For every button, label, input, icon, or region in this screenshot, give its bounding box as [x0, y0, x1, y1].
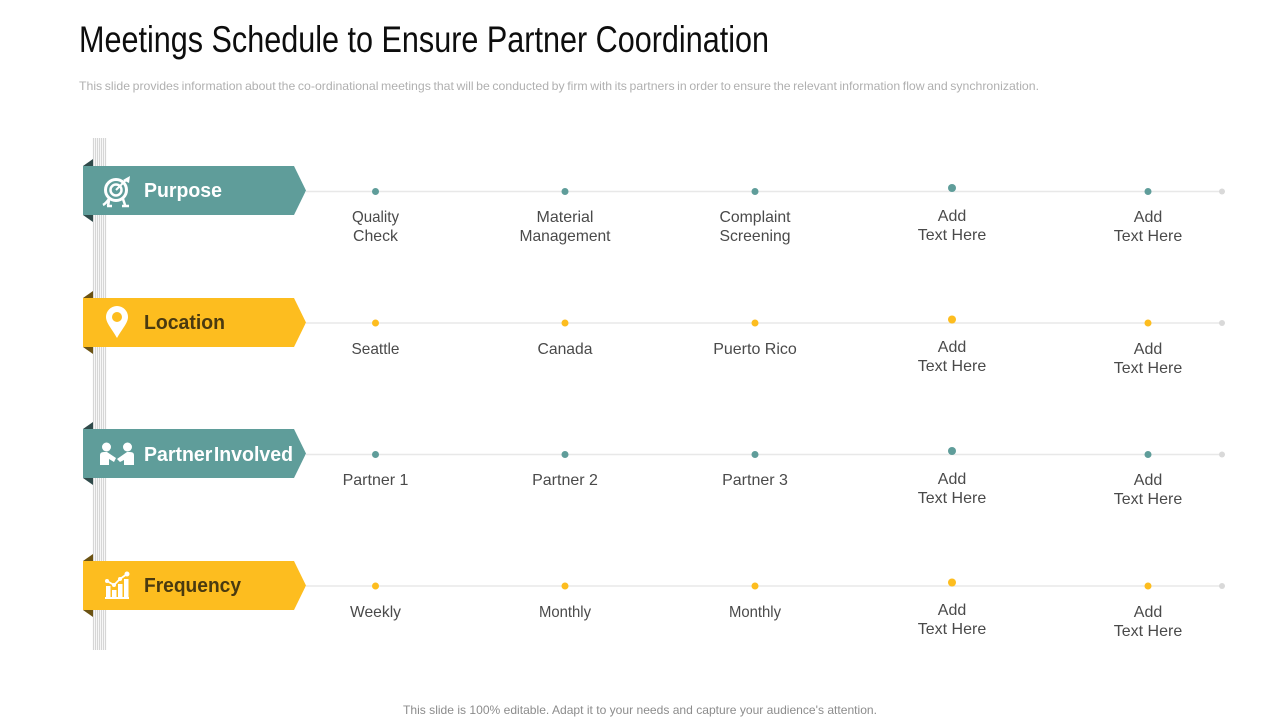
banner: purpose — [83, 159, 306, 222]
labels: partner involved: Partner 1 — [343, 472, 409, 489]
icon: map pin — [106, 306, 128, 338]
labels: partner involved: Text Here — [918, 490, 986, 507]
icon: handshake — [100, 442, 134, 465]
labels: purpose: Management — [520, 228, 611, 245]
labels: purpose: Material — [537, 209, 593, 226]
labels: frequency: Add — [938, 602, 966, 619]
banner: frequency: Frequency — [144, 575, 242, 597]
title: Meetings Schedule to Ensure Partner Coordination — [79, 19, 769, 60]
labels: frequency: Add — [1134, 604, 1162, 621]
banner: purpose: Purpose — [144, 180, 222, 202]
labels: purpose: Text Here — [1114, 228, 1182, 245]
subtitle: This slide provides information about the co-ordinational meetings that will be conducted by firm with its partners in order to ensure the relevant information flow and synchronization. — [79, 79, 1039, 93]
timeline: frequency — [306, 578, 1225, 590]
timeline: purpose — [306, 184, 1225, 195]
labels: purpose: Screening — [720, 228, 790, 245]
banner: partner involved: Partner Involved — [144, 444, 293, 466]
labels: frequency: Text Here — [1114, 623, 1182, 640]
footer note: This slide is 100% editable. Adapt it to your needs and capture your audience's attention. — [403, 703, 877, 717]
labels: location: Seattle — [352, 341, 400, 358]
banner: frequency — [83, 554, 306, 617]
labels: location: Text Here — [918, 358, 986, 375]
labels: partner involved: Text Here — [1114, 491, 1182, 508]
labels: purpose — [352, 208, 1182, 245]
labels: partner involved: Add — [1134, 472, 1162, 489]
labels: partner involved: Partner 3 — [722, 472, 788, 489]
labels: location — [352, 339, 1182, 377]
icon: growth chart — [105, 572, 130, 599]
labels: partner involved: Add — [938, 471, 966, 488]
vertical striped spine — [94, 138, 106, 650]
labels: frequency: Monthly — [729, 604, 781, 621]
labels: location: Puerto Rico — [713, 341, 797, 358]
timeline: partner involved — [306, 447, 1225, 458]
banner: location: Location — [144, 312, 225, 334]
icon: target — [103, 176, 130, 206]
row: location — [83, 291, 1225, 377]
labels: partner involved — [343, 471, 1182, 508]
labels: purpose: Check — [353, 228, 399, 245]
labels: purpose: Text Here — [918, 227, 986, 244]
labels: location: Add — [1134, 341, 1162, 358]
labels: location: Text Here — [1114, 360, 1182, 377]
row: frequency — [83, 554, 1225, 640]
labels: frequency: Text Here — [918, 621, 986, 638]
labels: purpose: Complaint — [720, 209, 791, 226]
banner: partner involved — [83, 422, 306, 485]
labels: location: Add — [938, 339, 966, 356]
row: partner involved — [83, 422, 1225, 508]
labels: purpose: Quality — [352, 209, 399, 226]
timeline: location — [306, 316, 1225, 326]
row: purpose — [83, 159, 1225, 245]
labels: frequency — [350, 602, 1182, 640]
labels: location: Canada — [538, 341, 593, 358]
labels: purpose: Add — [938, 208, 966, 225]
labels: frequency: Monthly — [539, 604, 591, 621]
banner: location — [83, 291, 306, 354]
labels: frequency: Weekly — [350, 604, 401, 621]
labels: purpose: Add — [1134, 209, 1162, 226]
labels: partner involved: Partner 2 — [532, 472, 598, 489]
